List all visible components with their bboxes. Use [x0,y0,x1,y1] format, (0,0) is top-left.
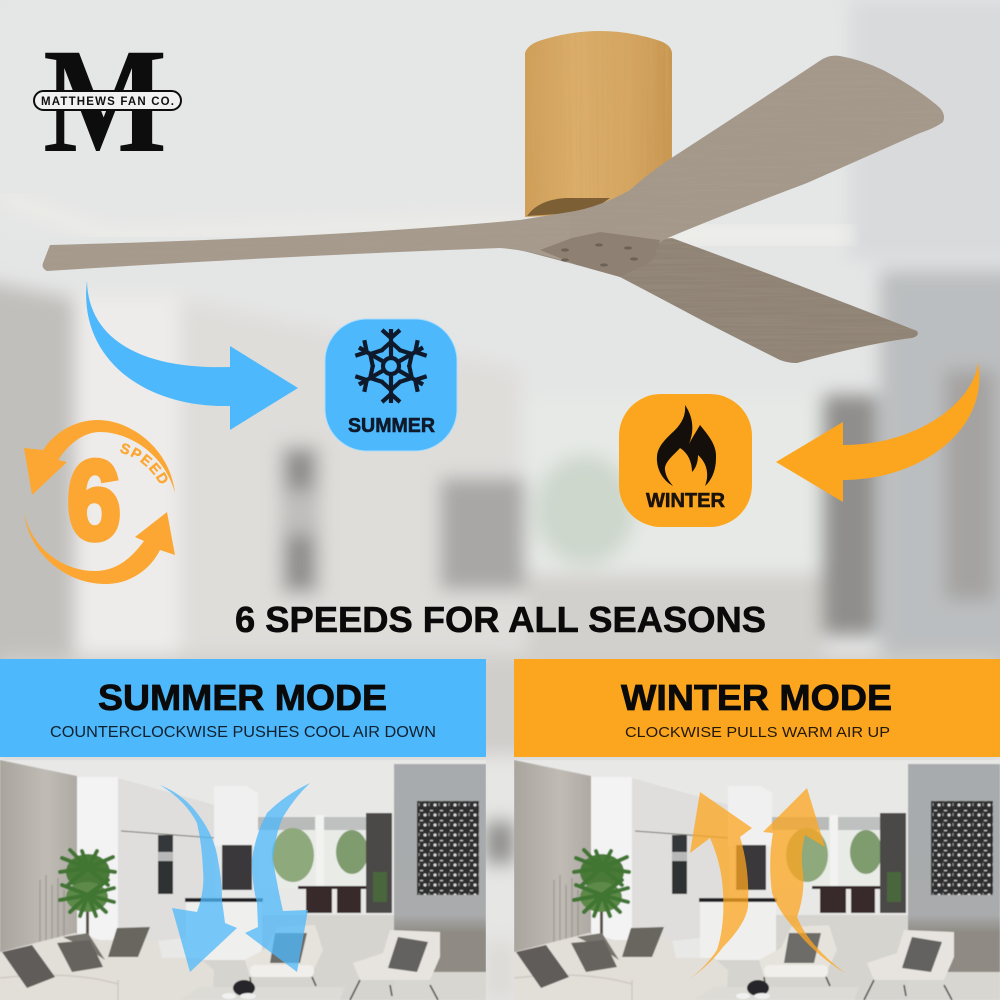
summer room scene [0,760,486,1000]
lower right blade [520,238,918,363]
logo: Matthews Fan Co.: M [43,18,167,184]
left blade [42,207,600,271]
icon: snowflake [354,329,428,403]
bottom arrow [24,512,175,584]
summer airflow arrows [160,783,310,972]
hub screws [561,243,638,267]
winter badge [619,394,752,527]
arrow: summer blue [86,281,298,430]
motor underside [527,198,610,216]
icon: flame [657,405,716,486]
speed label: SPEED [120,443,168,484]
summer header [0,659,486,757]
ceiling fan [42,31,944,363]
numeral 6: 6 [67,438,121,563]
label: winter: WINTER [646,490,726,512]
winter heading: WINTER MODE [621,677,892,718]
winter airflow arrows [688,788,845,980]
upper right blade [570,56,944,262]
6 speed icon [24,420,175,584]
panel: summer mode [0,659,486,1000]
summer heading: SUMMER MODE [98,677,387,718]
panel: winter mode [514,659,1000,1000]
logo: Matthews Fan Co.: MATTHEWS FAN CO. [41,96,174,108]
winter subheading: CLOCKWISE PULLS WARM AIR UP [625,724,890,741]
summer subheading: COUNTERCLOCKWISE PUSHES COOL AIR DOWN [50,724,436,741]
summer badge [325,319,457,451]
fan motor housing [525,31,672,217]
title: 6 SPEEDS FOR ALL SEASONS [235,599,766,640]
arrow: winter orange [776,362,979,502]
fan hub [540,232,660,277]
winter header [514,659,1000,757]
label: summer: SUMMER [348,415,436,437]
winter room scene [514,760,1000,1000]
top arrow [24,420,175,495]
